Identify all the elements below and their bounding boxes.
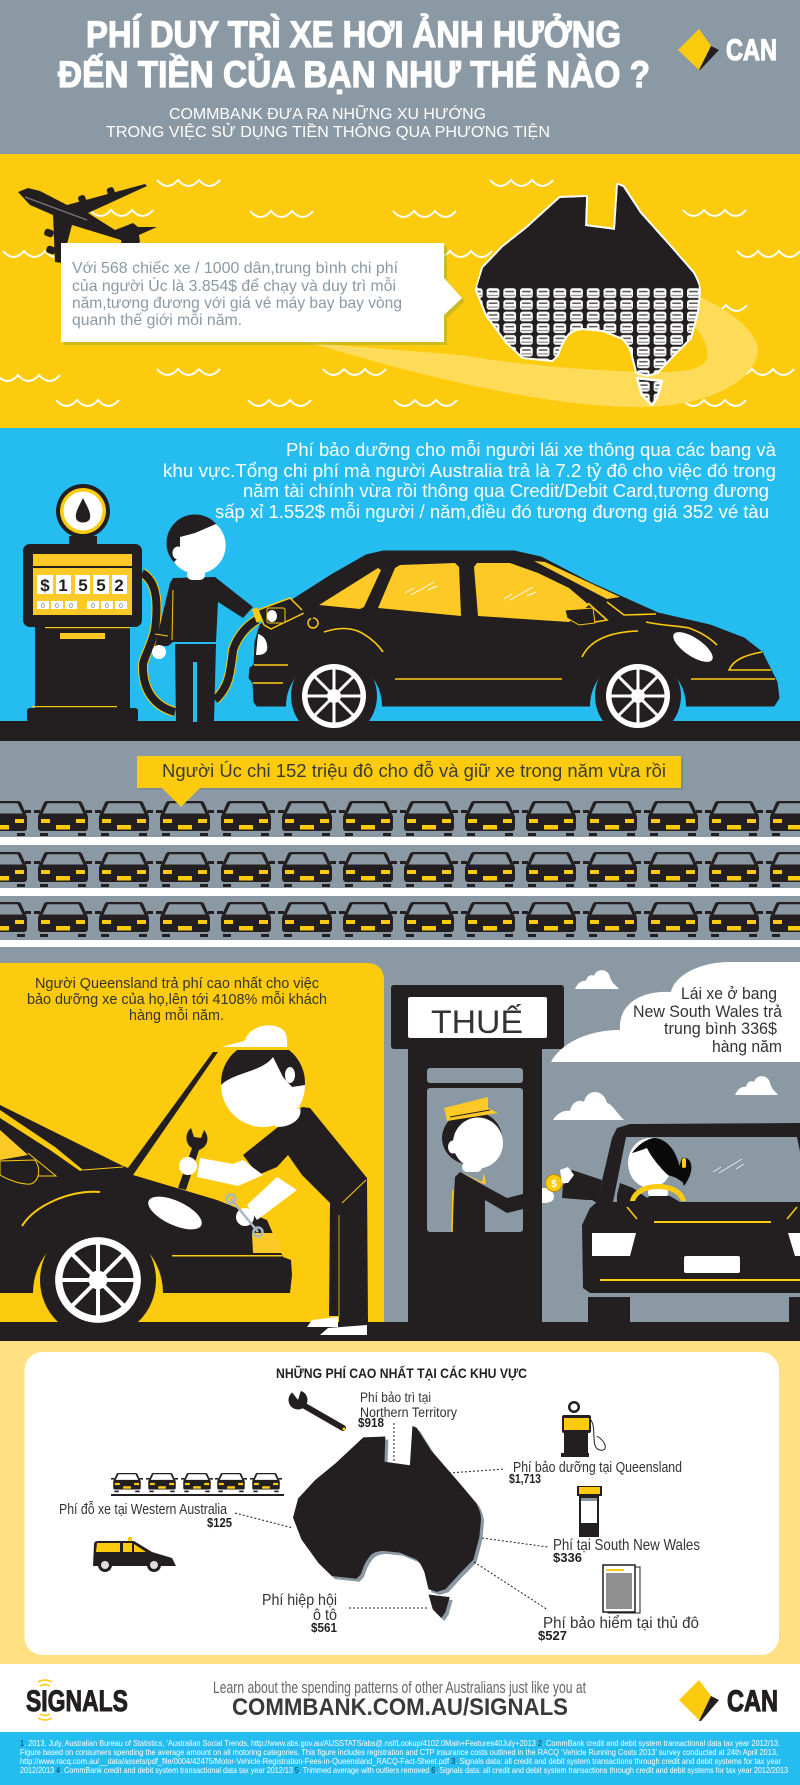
- icon: wrench: [288, 1387, 346, 1430]
- subtitle: COMMBANK ĐƯA RA NHỮNG XU HƯỚNG: [169, 103, 486, 123]
- logo: CAN bottom: CAN: [727, 1685, 778, 1718]
- callout: parking spend: [137, 756, 683, 807]
- label: Northern Territory: Phí bảo trì tại: [360, 1389, 431, 1405]
- waves: [0, 180, 800, 406]
- icon: row of cars: [111, 1473, 284, 1496]
- callout: parking spend: Người Úc chi 152 triệu đô cho đỗ và giữ xe trong năm vừa rồi: [162, 760, 666, 781]
- subtitle: TRONG VIỆC SỬ DỤNG TIỀN THÔNG QUA PHƯƠNG TIỆN: [106, 122, 550, 141]
- illustration: driver car front: [560, 1123, 800, 1322]
- text: Queensland: hàng mỗi năm.: [129, 1007, 224, 1024]
- callout: cost per year: năm,tương đương với giá vé máy bay bay vòng: [72, 295, 402, 312]
- footer: signals and logo: [0, 1664, 800, 1732]
- icon: fuel nozzle: [252, 598, 318, 629]
- swoosh trail: [311, 297, 758, 407]
- label: Queensland: [509, 1459, 682, 1486]
- logo: Signals: SIGNALS: [26, 1685, 128, 1718]
- logo: CAN bottom: [679, 1680, 778, 1721]
- heading: NHỮNG PHÍ CAO NHẤT TẠI CÁC KHU VỰC: [276, 1364, 527, 1381]
- icon: fuel hose outline: [142, 573, 257, 712]
- illustration: toll booth: THUẾ: [431, 1004, 523, 1040]
- white road strips: [0, 837, 800, 947]
- illustration: toll booth: [391, 985, 564, 1322]
- cloud: New South Wales: hàng năm: [712, 1037, 782, 1056]
- illustration: black car side view: [249, 551, 779, 739]
- figure: driver: [560, 1138, 691, 1203]
- callout: cost per year: của người Úc là 3.854$ để chạy và duy trì mỗi: [72, 276, 396, 295]
- label: Northern Territory: Northern Territory: [360, 1404, 457, 1420]
- logo: Signals: [26, 1680, 128, 1720]
- label: insurance: Phí bảo hiểm tại thủ đô: [543, 1614, 699, 1632]
- label: South New Wales: Phí tại South New Wales: [553, 1537, 700, 1554]
- logo: CAN top: CAN: [726, 34, 777, 67]
- panel: regional costs map: [0, 1341, 800, 1664]
- road: [0, 721, 800, 741]
- icon: fuel pump: 0: [91, 603, 95, 610]
- map: Australia with cars: [477, 185, 699, 405]
- icon: fuel pump: 0: [69, 603, 73, 610]
- figure: mechanic: [178, 1025, 368, 1335]
- icon: fuel pump: 0: [55, 603, 59, 610]
- icon: airplane: [18, 184, 157, 263]
- icon: fuel pump: 0: [119, 603, 123, 610]
- label: insurance: [538, 1614, 699, 1643]
- label: insurance: $527: [538, 1628, 567, 1643]
- text: Queensland: [27, 975, 327, 1024]
- icon: coin: $: [551, 1179, 557, 1190]
- icon: fuel pump: 0: [41, 603, 45, 610]
- icon: fuel pump: 0: [105, 603, 109, 610]
- small clouds: [553, 970, 778, 1120]
- callout: cost per year: [61, 243, 465, 345]
- icon: wrench: [178, 1128, 207, 1190]
- icon: fuel pump: 5: [78, 576, 88, 595]
- logo: CAN top: [678, 29, 777, 70]
- header band: [0, 0, 800, 154]
- panel: blue fuel section: [0, 428, 800, 741]
- text: maintenance spending: [163, 439, 777, 522]
- label: South New Wales: [553, 1537, 700, 1565]
- road: [0, 1322, 800, 1341]
- text: learn more: Learn about the spending patterns of other Australians just like you at: [213, 1678, 586, 1697]
- cloud: New South Wales: New South Wales trả: [633, 1002, 783, 1021]
- panel: parking cars: [0, 741, 800, 971]
- text: maintenance spending: năm tài chính vừa rồi thông qua Credit/Debit Card,tương đương: [243, 481, 769, 501]
- label: South New Wales: $336: [553, 1550, 582, 1565]
- label: auto association: Phí hiệp hội: [262, 1592, 337, 1609]
- panel: yellow Queensland: [0, 963, 384, 1322]
- text: maintenance spending: khu vực.Tổng chi phí mà người Australia trả là 7.2 tỷ đô cho việc đó trong: [163, 461, 776, 481]
- icon: fuel pump: 1: [58, 576, 68, 595]
- icon: documents: [603, 1565, 640, 1613]
- figure: man at pump: [152, 514, 253, 722]
- label: Northern Territory: [358, 1389, 457, 1430]
- panel: mechanic and toll: [0, 962, 800, 1341]
- label: auto association: $561: [311, 1620, 337, 1635]
- text: Queensland: bảo dưỡng xe của họ,lên tới 4108% mỗi khách: [27, 991, 327, 1008]
- subtitle: [106, 103, 550, 141]
- label: Northern Territory: $918: [358, 1415, 384, 1430]
- icon: fuel pump: 2: [114, 576, 124, 595]
- label: auto association: [262, 1592, 337, 1635]
- illustration: car with open hood: [0, 1052, 292, 1338]
- icon: fuel pump: 5: [96, 576, 106, 595]
- figure: toll attendant: [442, 1097, 562, 1232]
- icon: toll booth: [577, 1486, 602, 1537]
- text: maintenance spending: sấp xỉ 1.552$ mỗi người / năm,điều đó tương đương giá 352 vé tàu: [215, 501, 769, 522]
- cloud: New South Wales: Lái xe ở bang: [681, 984, 777, 1003]
- title: [58, 13, 650, 95]
- label: Queensland: Phí bảo dưỡng tại Queensland: [513, 1459, 682, 1476]
- car rows: [0, 801, 800, 937]
- label: Western Australia: [59, 1501, 232, 1530]
- icon: taxi: [93, 1537, 176, 1572]
- panel: yellow world trip: [0, 154, 800, 428]
- text: maintenance spending: Phí bảo dưỡng cho mỗi người lái xe thông qua các bang và: [286, 439, 777, 460]
- callout: cost per year: quanh thế giới mỗi năm.: [72, 310, 242, 329]
- icon: small pump: [561, 1401, 605, 1457]
- label: Western Australia: Phí đỗ xe tại Western Australia: [59, 1501, 228, 1518]
- label: auto association: ô tô: [313, 1607, 337, 1624]
- label: Queensland: $1,713: [509, 1471, 541, 1486]
- icon: fuel pump: $: [40, 576, 50, 595]
- title: PHÍ DUY TRÌ XE HƠI ẢNH HƯỞNG: [86, 13, 621, 55]
- label: Western Australia: $125: [207, 1515, 232, 1530]
- title: ĐẾN TIỀN CỦA BẠN NHƯ THẾ NÀO ?: [58, 53, 650, 95]
- text: Queensland: Người Queensland trả phí cao nhất cho việc: [35, 975, 319, 992]
- footnotes: [0, 1732, 800, 1785]
- icon: hose inner: [142, 573, 257, 712]
- cloud: New South Wales: [551, 962, 800, 1062]
- callout: cost per year: Với 568 chiếc xe / 1000 dân,trung bình chi phí: [72, 260, 399, 277]
- leader lines: [235, 1423, 548, 1610]
- footnotes: 1. 2013, July, Australian Bureau of Statistics, ‘Australian Social Trends, http://www.abs.gov.au/AUSSTATS/abs@.nsf/Lookup/4102.0Main+Features40July+2013 2. CommBank credit and debit system transactional data tax year 2012/13.: [20, 1738, 780, 1748]
- text: website: COMMBANK.COM.AU/SIGNALS: [232, 1694, 568, 1721]
- cloud: New South Wales: trung bình 336$: [664, 1019, 778, 1038]
- icon: fuel pump: [23, 484, 142, 722]
- map: Australia: [293, 1426, 484, 1621]
